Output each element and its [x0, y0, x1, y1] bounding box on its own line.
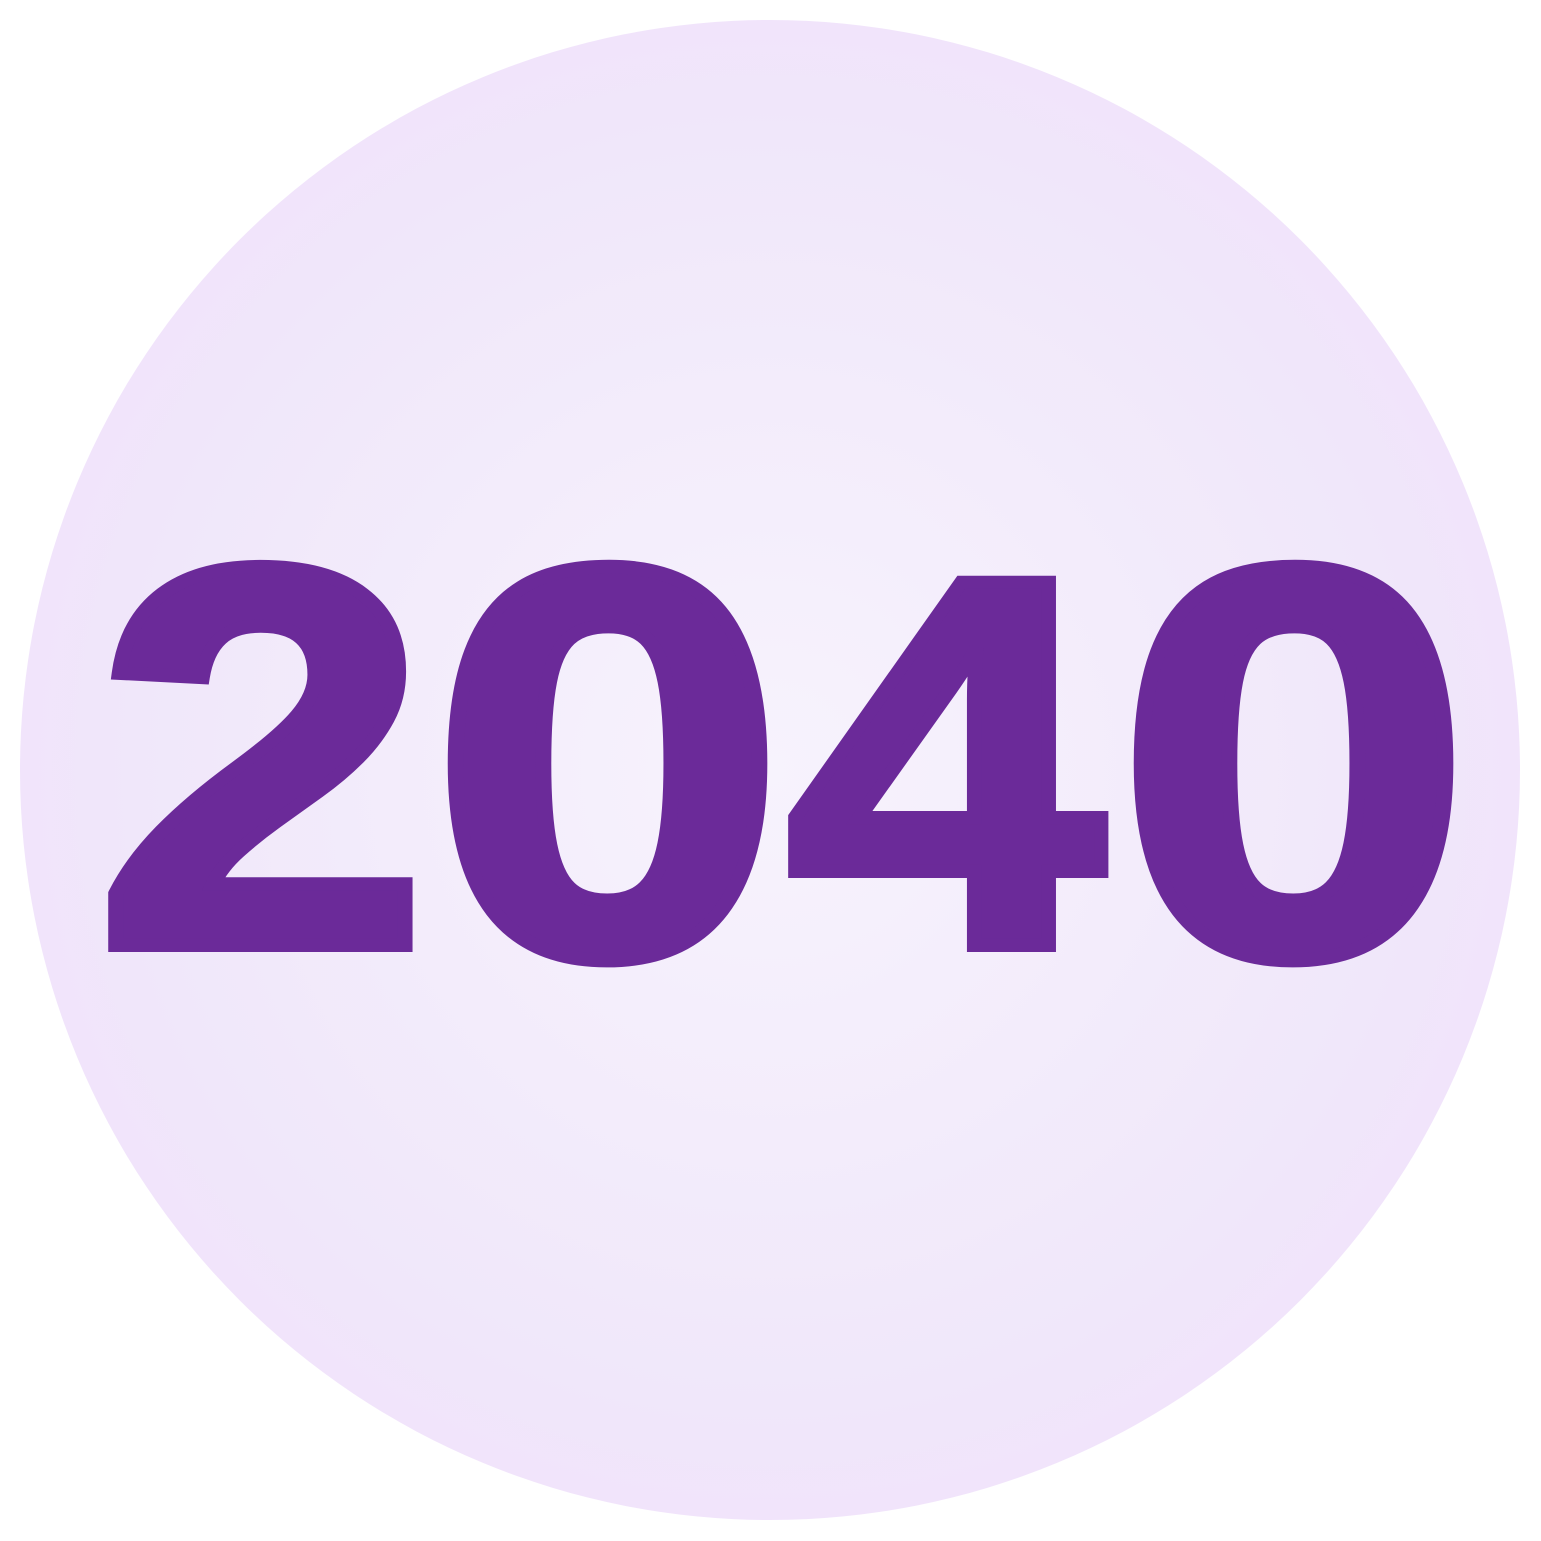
digit 0: 0: [430, 452, 786, 1073]
digit 0: 0: [1116, 452, 1472, 1073]
digit 4: 4: [787, 467, 1108, 1058]
year heading: 2040: [95, 452, 1472, 1073]
digit 2: 2: [95, 455, 429, 1061]
